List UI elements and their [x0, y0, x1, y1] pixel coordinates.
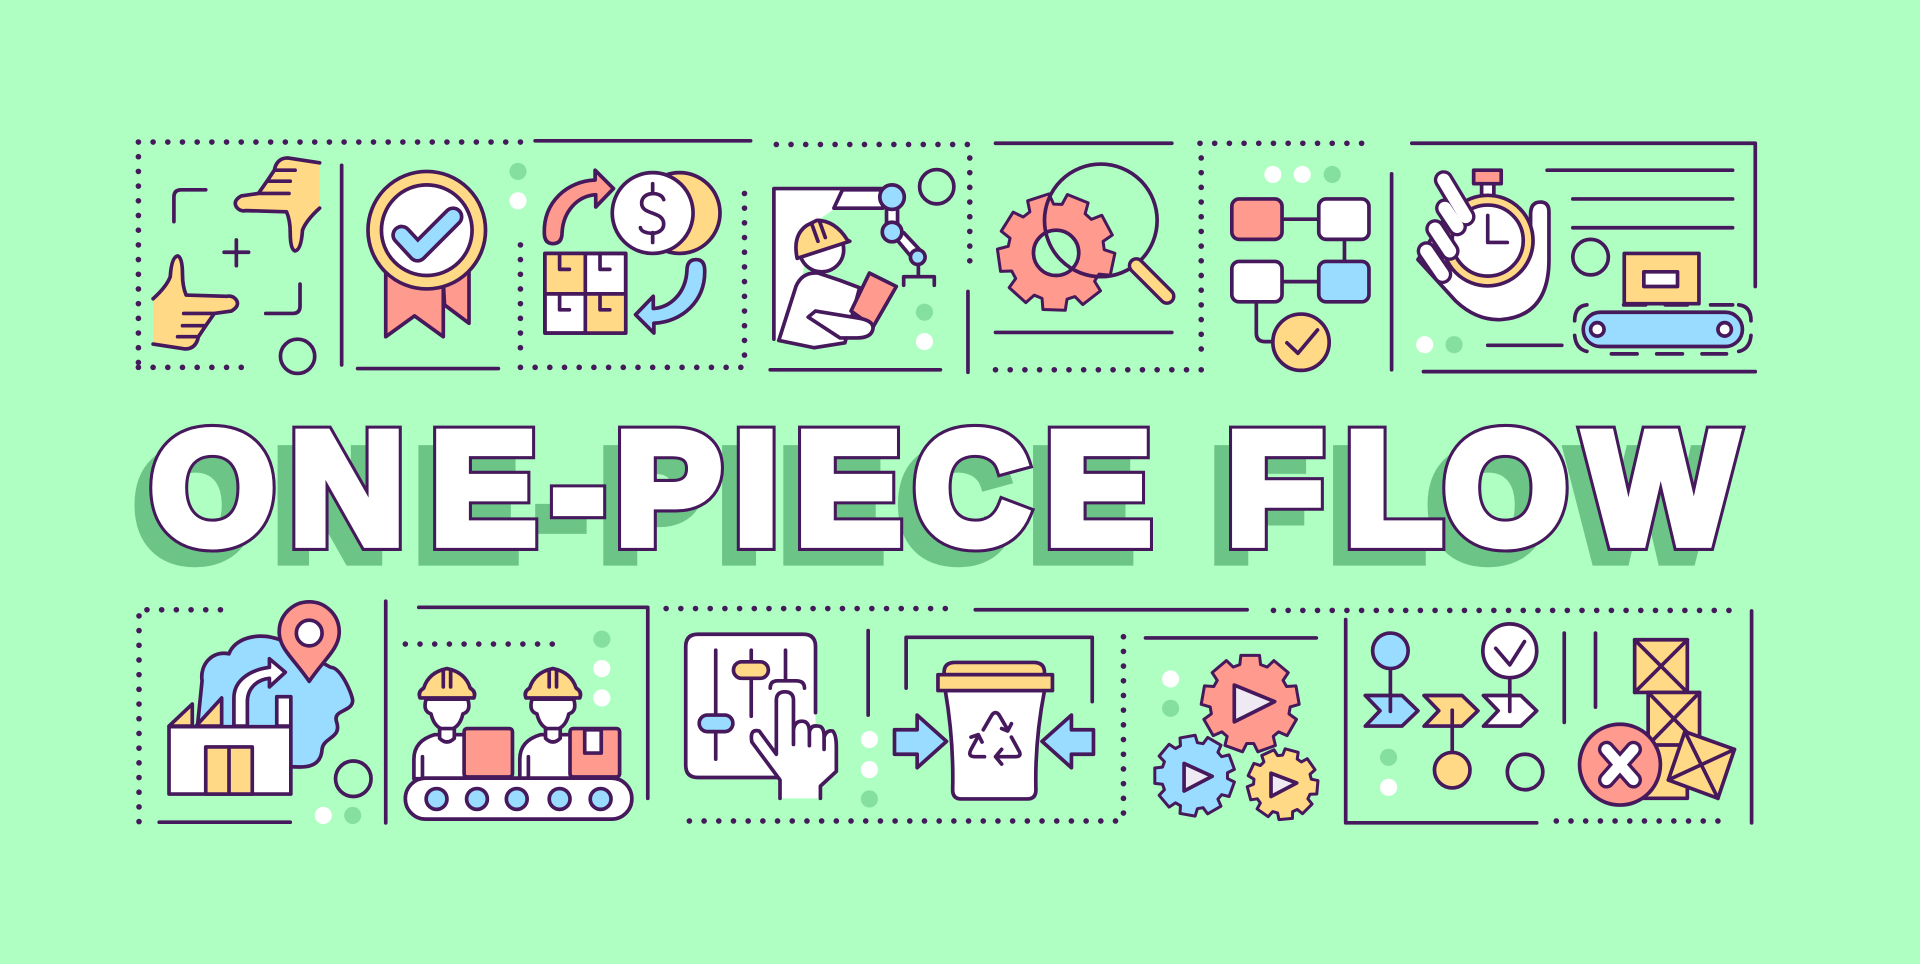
panel frame: first dotted border [138, 142, 522, 367]
icon: three gears with play symbols [1143, 638, 1320, 827]
panel frame: worker border [770, 144, 971, 372]
icon: mixer sliders with hand [686, 634, 836, 798]
panel frame: right top rules [1392, 143, 1755, 372]
icon: flow chart [1232, 166, 1369, 370]
icon: box on conveyor belt [1575, 253, 1751, 354]
panel frame: bottom-left border [139, 601, 386, 824]
panel frame: magnifier rules [996, 143, 1370, 370]
icon: product and money exchange [544, 170, 720, 333]
icon: worker with robotic arm [774, 185, 934, 348]
icon: quality badge [368, 171, 486, 337]
panel frame: workers border [405, 607, 648, 798]
icon: workers at conveyor [405, 669, 632, 819]
icon: stopwatch in hand [1418, 170, 1549, 320]
panel frame: process steps border [1273, 610, 1752, 823]
panel frame: mixer and bin dotted border [666, 609, 1247, 821]
icon: recycling bin with arrows [894, 662, 1093, 799]
decorative dots and rules around badge [280, 141, 751, 373]
icon: process chevrons with milestones [1365, 624, 1543, 796]
title shadow: ONE-PIECE FLOW [134, 416, 1720, 594]
title: ONE-PIECE FLOW [151, 399, 1737, 577]
icon: rejected boxes [1580, 640, 1734, 805]
icon: framing hands [153, 158, 320, 349]
icon: gear under magnifier [987, 164, 1167, 322]
icon: factory relocation [169, 602, 353, 794]
title outline: ONE-PIECE FLOW [151, 399, 1737, 577]
